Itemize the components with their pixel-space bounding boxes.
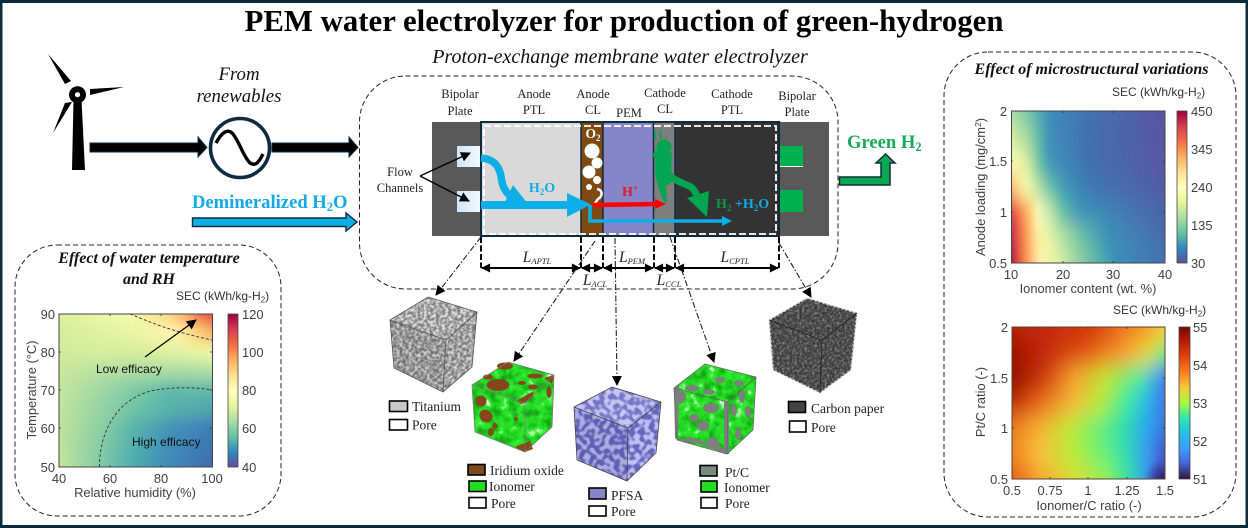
colorbar title: SEC (kWh/kg-H	[176, 289, 261, 303]
icon: wind turbine	[48, 54, 124, 170]
leader lines to microstructures	[436, 237, 811, 385]
axis ticks: 100	[201, 471, 223, 486]
arrow: inverter to electrolyzer	[272, 137, 358, 157]
text: from renewables: From	[217, 64, 260, 85]
dimension labels: CPTL	[729, 256, 750, 266]
label: products: 2	[727, 203, 732, 213]
dimension labels: L	[583, 272, 592, 289]
annotation: low efficacy: Low efficacy	[96, 362, 162, 376]
microstructure: anode catalyst layer	[468, 362, 564, 511]
legend: Pore	[811, 420, 836, 435]
heatmap: temperature vs humidity	[58, 314, 213, 468]
label: water: 2	[540, 187, 545, 197]
axis ticks: top chart: 30	[1106, 267, 1120, 282]
cube	[769, 298, 857, 393]
label: flow channels	[377, 153, 470, 201]
layer labels: Bipolar	[441, 87, 480, 101]
colorbar: bottom chart: 55	[1193, 320, 1207, 335]
legend: Pore	[725, 496, 750, 511]
panel outline	[944, 52, 1236, 517]
label: proton: H	[622, 185, 633, 200]
text: from renewables: renewables	[197, 86, 281, 107]
panel: electrolyzer	[360, 46, 838, 289]
axis ticks: 40	[52, 471, 66, 486]
heatmap: Pt/C vs ionomer/C	[1012, 326, 1166, 480]
colorbar: 120	[242, 307, 264, 322]
dimension labels: APTL	[530, 256, 552, 266]
legend: Carbon paper	[811, 401, 885, 416]
dimension labels: ACL	[591, 279, 607, 289]
label: products: O	[758, 197, 769, 212]
hydrogen flow: H	[653, 127, 663, 142]
colorbar title: bottom chart: )	[1202, 303, 1206, 317]
colorbar title: bottom chart: SEC (kWh/kg-H	[1113, 303, 1198, 317]
axis ticks: top chart: 1	[1000, 205, 1007, 220]
colorbar title: top chart: )	[1201, 85, 1205, 99]
label: water: H	[529, 181, 540, 196]
legend: Pt/C	[725, 465, 749, 480]
axis ticks: 80	[41, 345, 55, 360]
axis ticks: bottom chart: 1	[1084, 483, 1092, 498]
layer labels: Bipolar	[778, 89, 817, 103]
label: products: 2	[754, 203, 759, 213]
dimension labels: L	[619, 249, 628, 266]
arrow: proton flow	[593, 204, 656, 205]
label: products: H	[716, 197, 727, 212]
axis titles: bottom chart	[973, 367, 1142, 513]
label: products: +H	[731, 197, 754, 212]
panel heading: Proton-exchange membrane water electrolyzer	[431, 46, 808, 68]
layer labels: Anode	[517, 87, 551, 101]
colorbar: bottom chart: 51	[1193, 472, 1207, 487]
axis titles: top chart: Ionomer content (wt. %)	[1020, 281, 1156, 296]
axis ticks: bottom chart: 0.5	[1003, 483, 1021, 498]
cube	[674, 364, 756, 454]
layer labels: PEM	[616, 106, 642, 120]
label: demineralized water: Demineralized H	[192, 192, 327, 213]
colorbar: top chart	[1177, 104, 1213, 271]
oxygen bubbles: 2	[596, 133, 601, 143]
axis ticks: bottom chart: 2	[1001, 320, 1008, 335]
dimension labels: CCL	[665, 279, 682, 289]
axis ticks: top chart: 2	[1000, 104, 1007, 119]
hydrogen flow	[653, 127, 709, 217]
colorbar title: top chart: 2	[1197, 92, 1202, 100]
axis ticks: 80	[154, 471, 168, 486]
axis titles: bottom chart: Pt/C ratio (-)	[973, 367, 988, 437]
axis ticks: bottom chart: 1	[1001, 421, 1008, 436]
cell stack	[432, 122, 829, 236]
colorbar title: bottom chart: 2	[1198, 310, 1203, 318]
heatmap: anode loading vs ionomer content	[1011, 110, 1166, 264]
microstructure: cathode catalyst layer	[674, 364, 770, 511]
axis ticks: bottom chart	[990, 320, 1174, 498]
axis ticks: bottom chart: 0.5	[990, 472, 1008, 487]
axis titles: top chart	[973, 118, 1156, 296]
layer labels: PTL	[721, 103, 743, 117]
axis ticks: 60	[41, 421, 55, 436]
colorbar: 100	[242, 345, 264, 360]
label: demineralized water: O	[333, 192, 348, 213]
label: demineralized water: 2	[327, 200, 333, 214]
colorbar: 60	[242, 421, 256, 436]
axis titles: top chart: )	[973, 118, 988, 122]
axis titles: top chart: 2	[973, 122, 983, 127]
colorbar title: )	[265, 289, 269, 303]
panel outline	[15, 245, 281, 516]
label: flow channels: Flow	[387, 165, 413, 179]
arrow: turbine to inverter	[90, 137, 207, 157]
axis ticks: top chart: 1.5	[989, 154, 1007, 169]
dimension labels: PEM	[627, 256, 646, 266]
hydrogen flow: 2	[663, 134, 668, 144]
legend: Pore	[611, 504, 636, 519]
label: proton: +	[633, 183, 638, 193]
arrowhead: proton	[655, 199, 666, 209]
axis ticks: top chart: 0.5	[989, 256, 1007, 271]
layer labels	[441, 86, 817, 120]
annotation: high efficacy: High efficacy	[132, 435, 200, 449]
legend: Titanium	[412, 399, 462, 414]
panel heading: and RH	[123, 271, 176, 288]
panel: microstructural variations	[944, 52, 1236, 520]
dimension labels: L	[523, 249, 531, 266]
legend	[788, 401, 885, 435]
axis titles	[24, 340, 196, 500]
oxygen bubbles	[582, 126, 602, 204]
layer labels: PTL	[523, 103, 545, 117]
axis ticks: top chart: 10	[1004, 267, 1018, 282]
microstructure: PFSA membrane	[574, 387, 661, 519]
legend	[390, 399, 462, 432]
title: PEM water electrolyzer for production of green-hydrogen	[245, 4, 1003, 38]
panel heading: Effect of water temperature	[57, 250, 240, 267]
axis ticks: 90	[41, 307, 55, 322]
layer labels: Cathode	[644, 86, 686, 100]
colorbar title: 2	[261, 296, 266, 304]
axis ticks: 60	[103, 471, 117, 486]
oxygen bubbles: O	[585, 126, 596, 141]
axis titles: Relative humidity (%)	[74, 485, 196, 500]
legend: Pore	[491, 496, 516, 511]
axis ticks: bottom chart: 1.5	[1156, 483, 1174, 498]
layer labels: Plate	[448, 104, 473, 118]
panel heading: Effect of microstructural variations	[974, 61, 1208, 78]
legend: Ionomer	[724, 480, 770, 495]
colorbar: bottom chart	[1179, 320, 1207, 487]
axis ticks: top chart	[989, 104, 1172, 282]
axis titles: top chart: Anode loading (mg/cm	[973, 127, 988, 256]
colorbar: top chart: 450	[1191, 104, 1213, 119]
legend	[468, 463, 564, 511]
axis ticks: bottom chart: 0.75	[1037, 483, 1063, 498]
legend: PFSA	[611, 488, 644, 503]
colorbar: top chart: 135	[1191, 218, 1213, 233]
legend: Ionomer	[489, 479, 535, 494]
legend: Iridium oxide	[490, 463, 564, 478]
label: flow channels: Channels	[377, 181, 423, 195]
layer labels: Plate	[784, 105, 810, 119]
panel: water temperature and RH	[15, 245, 281, 516]
legend	[589, 488, 644, 519]
icon: AC source	[210, 118, 270, 178]
panel heading	[57, 250, 240, 288]
colorbar: 40	[242, 460, 256, 475]
dimension labels: L	[721, 249, 729, 266]
text: from renewables	[197, 64, 281, 107]
layer labels: Anode	[576, 87, 610, 101]
colorbar	[228, 307, 264, 475]
dimension lines	[481, 237, 779, 268]
arrow: water feed	[192, 213, 357, 231]
colorbar: bottom chart: 52	[1193, 434, 1207, 449]
axis ticks: 70	[41, 383, 55, 398]
axis ticks: bottom chart: 1.5	[990, 371, 1008, 386]
microstructure: titanium PTL	[390, 297, 477, 432]
legend: Pore	[412, 418, 437, 432]
green hydrogen output: 2	[915, 140, 922, 154]
layer labels: CL	[585, 103, 601, 117]
axis ticks	[41, 307, 223, 486]
panel outline	[360, 76, 838, 289]
axis titles: Temperature (°C)	[24, 340, 39, 440]
axis ticks: bottom chart: 1.25	[1114, 483, 1140, 498]
layer labels: Cathode	[711, 87, 753, 101]
cube	[472, 362, 554, 452]
colorbar: bottom chart: 53	[1193, 396, 1207, 411]
cube	[390, 297, 477, 392]
colorbar: bottom chart: 54	[1193, 358, 1207, 373]
dimension labels: L	[657, 272, 665, 289]
dimension labels	[522, 249, 750, 289]
label: water: O	[544, 181, 555, 196]
green hydrogen output: Green H	[847, 132, 915, 153]
axis ticks: top chart: 40	[1158, 267, 1172, 282]
cube	[574, 387, 661, 481]
green hydrogen output	[840, 132, 922, 185]
layer labels: CL	[657, 102, 673, 116]
axis titles: bottom chart: Ionomer/C ratio (-)	[1036, 498, 1142, 513]
colorbar title: top chart: SEC (kWh/kg-H	[1112, 85, 1197, 99]
colorbar: top chart: 30	[1191, 256, 1205, 271]
microstructure: carbon paper	[769, 298, 885, 435]
legend	[700, 465, 770, 511]
axis ticks: top chart: 20	[1056, 267, 1070, 282]
colorbar: top chart: 240	[1191, 180, 1213, 195]
axis ticks: 50	[41, 460, 55, 475]
colorbar: top chart: 345	[1191, 142, 1213, 157]
annotation: low efficacy	[96, 320, 196, 376]
arrow: water flow	[481, 158, 732, 226]
colorbar: 80	[242, 383, 256, 398]
